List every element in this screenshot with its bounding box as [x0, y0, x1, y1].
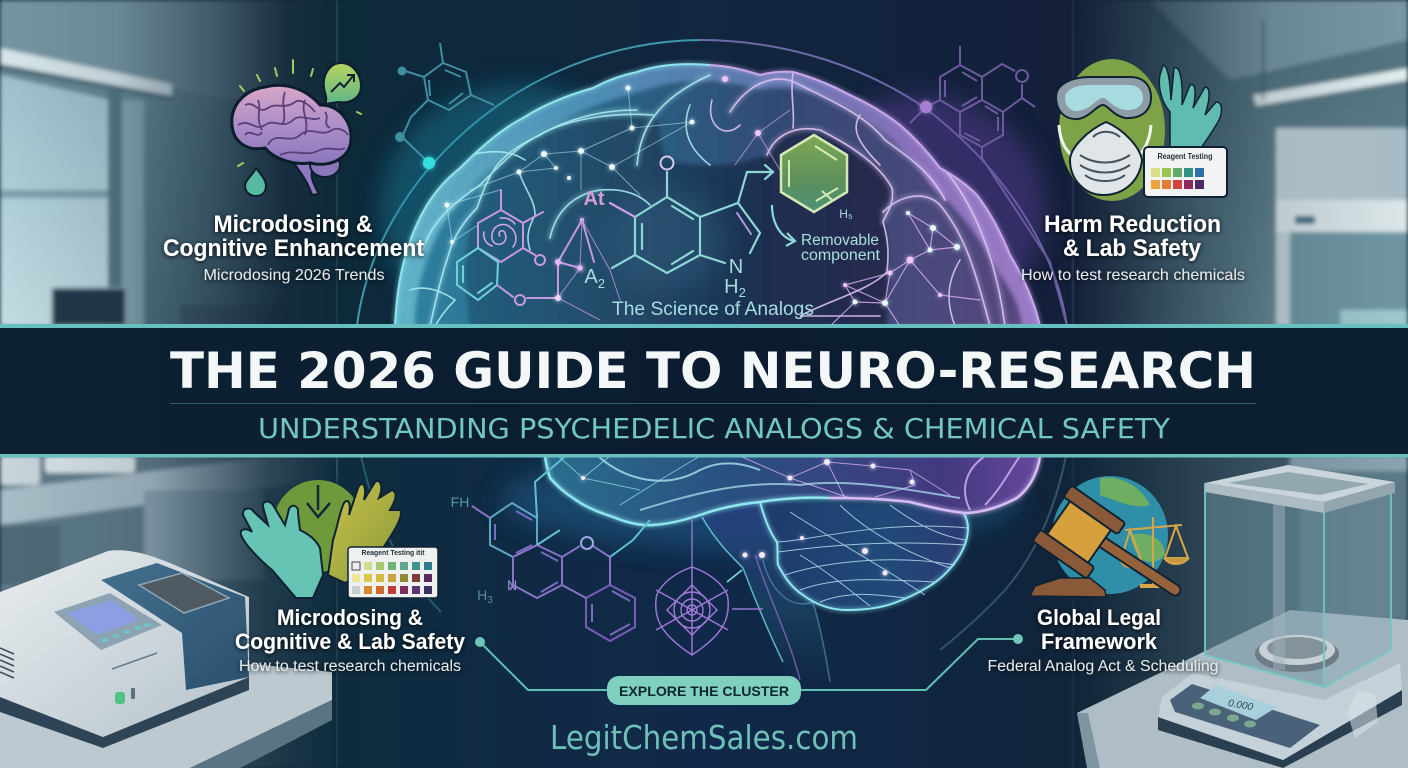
subheading: Microdosing 2026 Trends	[204, 267, 384, 284]
subheading: How to test research chemicals	[1021, 267, 1245, 284]
heading: microdosing, cognitive and lab safety: Microdosing &	[277, 605, 423, 630]
icon: safety goggles, mask, glove and reagent card	[1056, 59, 1227, 201]
heading: microdosing, cognitive and lab safety: Cognitive & Lab Safety	[235, 629, 466, 654]
website address: LegitChemSales.com	[550, 718, 858, 757]
background: upper right lab	[1074, 0, 1408, 330]
label: H3: H	[477, 587, 487, 603]
central molecule: analog structure	[583, 156, 773, 300]
heading: harm reduction and lab safety	[1021, 211, 1245, 284]
icon: gloves and reagent testing kit	[241, 480, 438, 598]
lab instrument: spectrophotometer	[0, 550, 332, 768]
button: explore the cluster	[607, 676, 801, 705]
heading: global legal framework	[988, 605, 1218, 675]
large orbit arcs around brain	[357, 40, 1067, 650]
heading: microdosing and cognitive enhancement	[163, 211, 424, 284]
molecule: lower mandala	[656, 518, 763, 655]
label: A2: 2	[598, 276, 605, 291]
brain glow	[380, 85, 1045, 550]
heading: global legal framework: Global Legal	[1037, 605, 1161, 630]
background: upper left lab	[0, 0, 336, 330]
button: explore the cluster: EXPLORE THE CLUSTER	[619, 683, 789, 699]
brain: upper cerebrum	[380, 55, 1050, 330]
label: A2: A	[584, 266, 598, 288]
heading: harm reduction and lab safety: & Lab Safety	[1063, 235, 1202, 262]
label: NH2: N	[729, 256, 743, 278]
background: lower right lab	[1074, 455, 1408, 768]
background: lower left lab	[0, 455, 336, 768]
molecule: spiral ring (left of brain)	[457, 190, 594, 305]
central label: the science of analogs: The Science of Analogs	[612, 299, 814, 320]
removable component: green hexagon	[772, 135, 881, 264]
heading: microdosing and cognitive enhancement: Cognitive Enhancement	[163, 235, 424, 262]
brain: lower cerebrum, stem and cerebellum	[530, 450, 1050, 690]
icon: gavel, globe and scales	[1030, 476, 1189, 597]
card label: Reagent Testing	[1158, 152, 1213, 161]
subheading: How to test research chemicals	[239, 658, 461, 675]
label: N: N	[507, 577, 517, 593]
label: FH: FH	[451, 494, 469, 510]
label: removable component: Removable	[801, 232, 879, 249]
molecule: lower left	[451, 448, 650, 641]
heading: harm reduction and lab safety: Harm Reduction	[1044, 211, 1221, 238]
lab instrument: analytical balance	[1077, 465, 1408, 768]
heading: microdosing and cognitive enhancement: Microdosing &	[214, 211, 372, 238]
label: removable component: component	[801, 247, 881, 264]
label: H3: 3	[487, 595, 493, 606]
heading: global legal framework: Framework	[1041, 629, 1158, 654]
icon: brain with growth chart	[232, 60, 361, 196]
label: At: At	[583, 188, 605, 210]
molecule: upper left	[396, 43, 494, 169]
lab instrument: analytical balance: 0.000	[1227, 698, 1254, 713]
subheading: Federal Analog Act & Scheduling	[988, 658, 1218, 675]
banner: title strip	[0, 324, 1408, 458]
label: H5: H₅	[839, 207, 853, 221]
label: H2: 2	[739, 285, 746, 300]
subtitle: UNDERSTANDING PSYCHEDELIC ANALOGS & CHEMICAL SAFETY	[258, 412, 1171, 445]
heading: microdosing, cognitive and lab safety	[235, 605, 466, 675]
card label: Reagent Testing itit	[362, 548, 425, 557]
title: THE 2026 GUIDE TO NEURO-RESEARCH	[170, 342, 1256, 400]
connector lines to explore pill	[475, 634, 1023, 690]
label: H2: H	[724, 276, 739, 298]
molecule: upper right	[910, 46, 1067, 326]
